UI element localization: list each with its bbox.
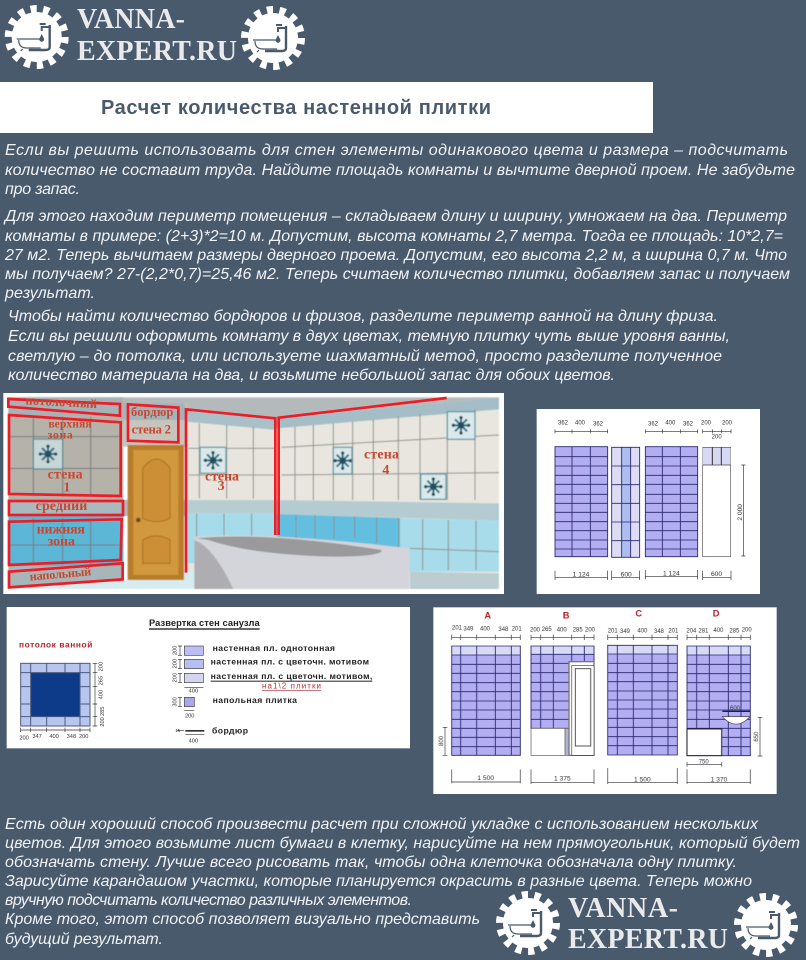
legend: 15: [175, 728, 181, 733]
logo wordmark: EXPERT.RU: [568, 924, 728, 955]
zone labels: потолочный: [25, 393, 97, 411]
zone labels: зона: [48, 535, 75, 550]
dimensions: 362: [593, 421, 604, 427]
logo wordmark: [568, 893, 728, 955]
elevation A: [439, 610, 522, 783]
text block: drawing method: будущий результат.: [5, 931, 163, 948]
left wall: [8, 397, 123, 589]
text block: borders and two colours: Чтобы найти количество бордюров и фризов, разделите периметр ванной на длину фриза.: [8, 308, 718, 325]
elevation A: 201: [452, 625, 463, 631]
zone labels: зона: [48, 429, 73, 442]
text block: drawing method: обозначать стену. Лучше всего рисовать так, чтобы одна клеточка обозначала одну плитку.: [5, 854, 737, 871]
legend: на1\2 плитки: [262, 682, 321, 691]
diagram heading: Развертка стен санузла: [149, 618, 260, 628]
ceiling plan: [19, 662, 106, 741]
text block: borders and two colours: Если вы решили оформить комнату в двух цветах, темную плитку чуть выше уровня ванны,: [8, 328, 730, 345]
zone labels: [25, 393, 399, 584]
elevation C: 400: [637, 628, 648, 634]
wall 3: [185, 410, 277, 577]
dimensions: 600: [711, 571, 722, 578]
text block: borders and two colours: количество материала на два, и возьмите небольшой запас для обоих цветов.: [8, 367, 615, 384]
tile motifs: [33, 439, 63, 469]
dimensions: 362: [648, 421, 659, 427]
text block: perimeter calculation: Для этого находим периметр помещения – складываем длину и ширину, умножаем на два. Периметр: [3, 208, 787, 225]
dimensions: 362: [683, 422, 694, 428]
zone labels: стена: [205, 470, 239, 485]
dimensions: 1 124: [573, 572, 590, 579]
zone labels: стена: [48, 467, 83, 482]
zone labels: верхняя: [48, 418, 92, 431]
elevation A: 1 500: [477, 775, 494, 782]
elevation D: 281: [698, 628, 709, 634]
legend: [173, 643, 372, 745]
elevation A: 800: [439, 735, 445, 746]
zone labels: бордюр: [131, 405, 173, 419]
elevation A: 201: [512, 627, 522, 633]
wall grid 4: [703, 447, 731, 557]
elevation D: 204: [686, 628, 697, 634]
elevation B: 400: [557, 627, 567, 633]
text block: perimeter calculation: 27 м2. Теперь вычитаем размеры дверного проема. Допустим, его высота 2,2 м, а ширина 0,7 м. Что: [4, 247, 787, 264]
text block: drawing method: Есть один хороший способ произвести расчет при сложной укладке с использованием нескольких: [5, 816, 759, 833]
bathtub: [194, 536, 409, 589]
icon: gear with bathtub left: [9, 10, 64, 64]
zone labels: средний: [36, 499, 87, 514]
elevation C: 348: [654, 629, 665, 635]
text block: perimeter calculation: результат.: [4, 285, 95, 302]
zone labels: 4: [382, 463, 389, 478]
elevation C: 201: [668, 629, 679, 635]
floor: [8, 570, 197, 589]
elevation D: 750: [699, 759, 709, 765]
logo wordmark: VANNA-: [568, 893, 678, 924]
text block: perimeter calculation: [3, 208, 790, 302]
dimensions: [555, 421, 745, 580]
wall grid 2: [612, 447, 640, 557]
elevation C: 1 500: [634, 776, 651, 783]
ceiling: [8, 397, 499, 424]
legend: 200: [173, 646, 179, 655]
elevation B: 1 375: [554, 776, 571, 783]
dimensions: 200: [712, 435, 722, 441]
elevation C: C: [635, 609, 642, 619]
text block: borders and two colours: [8, 308, 730, 384]
text block: drawing method: вручную подсчитать количество различных элементов.: [5, 892, 412, 909]
elevation C: [608, 609, 679, 784]
icon: gear with bathtub right: [738, 898, 794, 952]
legend: настенная пл. с цветочн. мотивом: [211, 657, 369, 667]
elevation A: 349: [463, 627, 474, 633]
icon: gear with bathtub left: [500, 896, 556, 950]
elevation D: 650: [754, 731, 760, 742]
wall 4: [277, 397, 499, 589]
text block: drawing method: Кроме того, этот способ позволяет визуально представить: [5, 911, 480, 928]
elevation B: 285: [573, 627, 583, 633]
ceiling plan: 200: [79, 734, 88, 740]
diagram: tile layout of four walls: [537, 409, 760, 594]
zone labels: нижняя: [37, 522, 85, 537]
ceiling plan: 347: [32, 734, 42, 740]
text block: perimeter calculation: мы получаем? 27-(2,2*0,7)=25,46 м2. Теперь считаем количество плитки, добавляем запас и получаем: [5, 266, 790, 283]
legend: бордюр: [212, 725, 248, 735]
elevation D: [686, 609, 762, 784]
text block: intro: [5, 142, 795, 198]
elevation A: 348: [498, 627, 509, 633]
elevation B: 200: [585, 627, 596, 633]
ceiling plan: 400: [99, 690, 105, 699]
legend: настенная пл. однотонная: [213, 643, 335, 653]
elevation D: 400: [713, 628, 724, 634]
elevation C: 201: [608, 628, 618, 634]
logo: bottom: [500, 893, 794, 955]
diagram: wall elevations A B C D: [433, 607, 777, 794]
elevation B: 265: [542, 627, 552, 633]
ceiling plan: 400: [49, 734, 59, 740]
text block: intro: про запас.: [5, 181, 80, 198]
wall grid 3: [645, 447, 698, 557]
zone labels: 1: [63, 481, 70, 496]
legend: 200: [173, 659, 179, 668]
dimensions: 200: [701, 421, 712, 427]
ceiling plan: 200: [100, 717, 106, 727]
elevation C: 349: [620, 629, 631, 635]
icon: gear with bathtub right: [246, 10, 300, 66]
ceiling plan: 200: [99, 662, 105, 671]
elevation D: 200: [742, 628, 752, 634]
elevation B: [530, 610, 596, 784]
ceiling plan: 265: [99, 676, 105, 685]
ceiling plan: 285: [100, 707, 106, 716]
logo: top: [9, 4, 300, 67]
elevation D: D: [713, 609, 720, 619]
legend: настенная пл. с цветочн. мотивом,: [211, 671, 372, 681]
elevation A: 400: [480, 626, 491, 632]
legend: напольная плитка: [213, 695, 297, 705]
title band: Расчет количества настенной плитки: [101, 97, 491, 119]
photo panel: bathroom wall zones: [3, 393, 504, 594]
dimensions: 362: [558, 421, 569, 427]
text block: drawing method: Зарисуйте карандашом участки, которые планируется окрасить в разные цвета. Теперь можно: [5, 873, 752, 890]
text block: drawing method: цветов. Для этого возьмите лист бумаги в клетку, нарисуйте на нем прямоугольник, который будет: [5, 835, 800, 852]
zone labels: стена 2: [132, 422, 171, 436]
legend: 200: [185, 713, 194, 719]
legend: 400: [189, 739, 198, 745]
elevation A: A: [484, 610, 491, 620]
door: [128, 445, 184, 580]
dimensions: 600: [621, 572, 632, 579]
elevation B: B: [563, 610, 570, 620]
red zone frames: [8, 398, 447, 587]
legend: 200: [173, 673, 179, 682]
dimensions: 400: [665, 421, 676, 427]
text block: perimeter calculation: комнаты в примере: (2+3)*2=10 м. Допустим, высота комнаты 2,7 метра. Тогда ее площадь: 10*2,7=: [5, 228, 783, 245]
logo wordmark: EXPERT.RU: [77, 36, 237, 67]
elevation D: 1 370: [711, 776, 728, 783]
legend: 400: [189, 688, 198, 694]
wall grid 1: [555, 447, 608, 557]
ceiling label: потолок ванной: [19, 640, 92, 650]
dimensions: 200: [722, 421, 733, 427]
ceiling plan: 348: [67, 734, 76, 740]
diagram: wall layout legend and ceiling: [7, 607, 410, 748]
text block: drawing method: [5, 816, 800, 948]
zone labels: стена: [364, 447, 399, 462]
text block: intro: Если вы решить использовать для стен элементы одинакового цвета и размера – подсчитать: [5, 142, 788, 159]
dimensions: 2 000: [737, 504, 744, 521]
elevation D: 285: [729, 628, 740, 634]
elevation B: 200: [530, 628, 541, 634]
logo wordmark: [77, 4, 237, 67]
dimensions: 400: [575, 421, 586, 427]
elevation D: 600: [730, 706, 741, 712]
dimensions: 1 124: [663, 570, 680, 577]
zone labels: 3: [218, 479, 225, 494]
legend: 300: [173, 697, 179, 707]
title band: [0, 82, 653, 133]
text block: intro: количество не составит труда. Найдите площадь комнаты и вычтите дверной проем. Не забудьте: [5, 162, 795, 179]
text block: borders and two colours: светлую – до потолка, или используете шахматный метод, просто разделите полученное: [8, 348, 722, 365]
zone labels: напольный: [29, 564, 92, 584]
ceiling plan: 200: [19, 735, 29, 741]
logo wordmark: VANNA-: [77, 4, 185, 35]
